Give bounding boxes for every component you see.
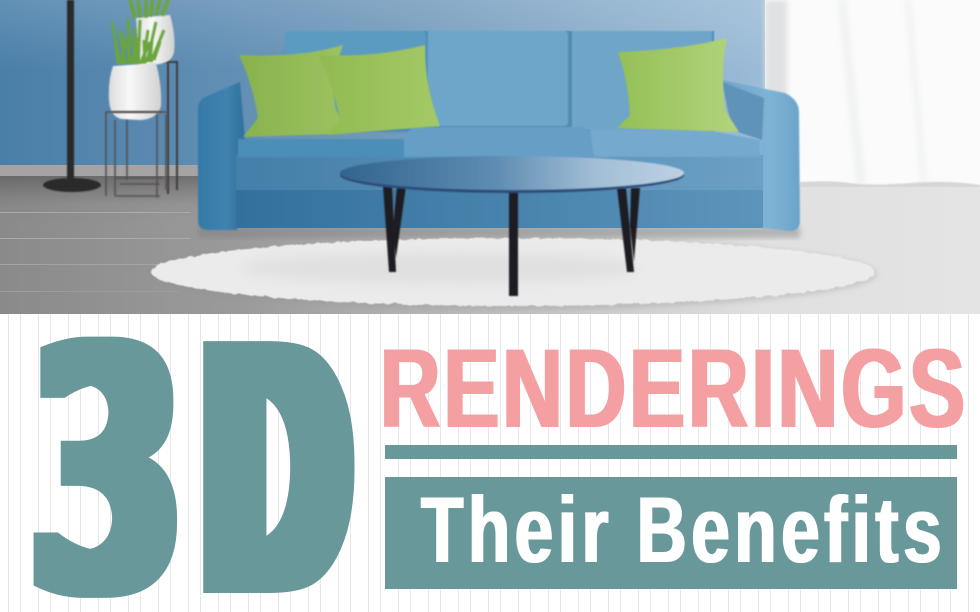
plant stand, front bbox=[105, 112, 167, 198]
seat fronts bbox=[236, 155, 763, 190]
green pillow left bbox=[239, 45, 345, 137]
floor lamp bbox=[43, 0, 101, 192]
seat cushions bbox=[238, 127, 760, 157]
plant stand, rear bbox=[157, 62, 178, 194]
right arm bbox=[722, 80, 800, 231]
green pillow middle bbox=[318, 45, 440, 135]
green pillow right bbox=[617, 38, 739, 132]
sofa shadow bbox=[198, 226, 800, 238]
floor bbox=[0, 168, 980, 314]
wall bbox=[0, 0, 780, 168]
room scene photo panel bbox=[0, 0, 980, 314]
sofa bbox=[198, 31, 800, 238]
subtitle banner bbox=[385, 477, 957, 589]
lower title panel with pinstripes bbox=[0, 275, 980, 612]
baseboard bbox=[0, 165, 198, 176]
rear plant pot bbox=[130, 0, 174, 66]
divider bar bbox=[385, 445, 957, 459]
front plant grass bbox=[112, 18, 164, 64]
rug bbox=[149, 238, 877, 309]
table top bbox=[340, 156, 684, 193]
curtain bbox=[765, 0, 980, 187]
front plant pot bbox=[109, 63, 162, 120]
coffee table bbox=[340, 156, 684, 296]
sofa base bbox=[236, 189, 763, 228]
left arm bbox=[198, 82, 245, 230]
right arm inner face bbox=[722, 82, 764, 140]
back cushions bbox=[284, 31, 714, 132]
table legs bbox=[383, 186, 640, 296]
